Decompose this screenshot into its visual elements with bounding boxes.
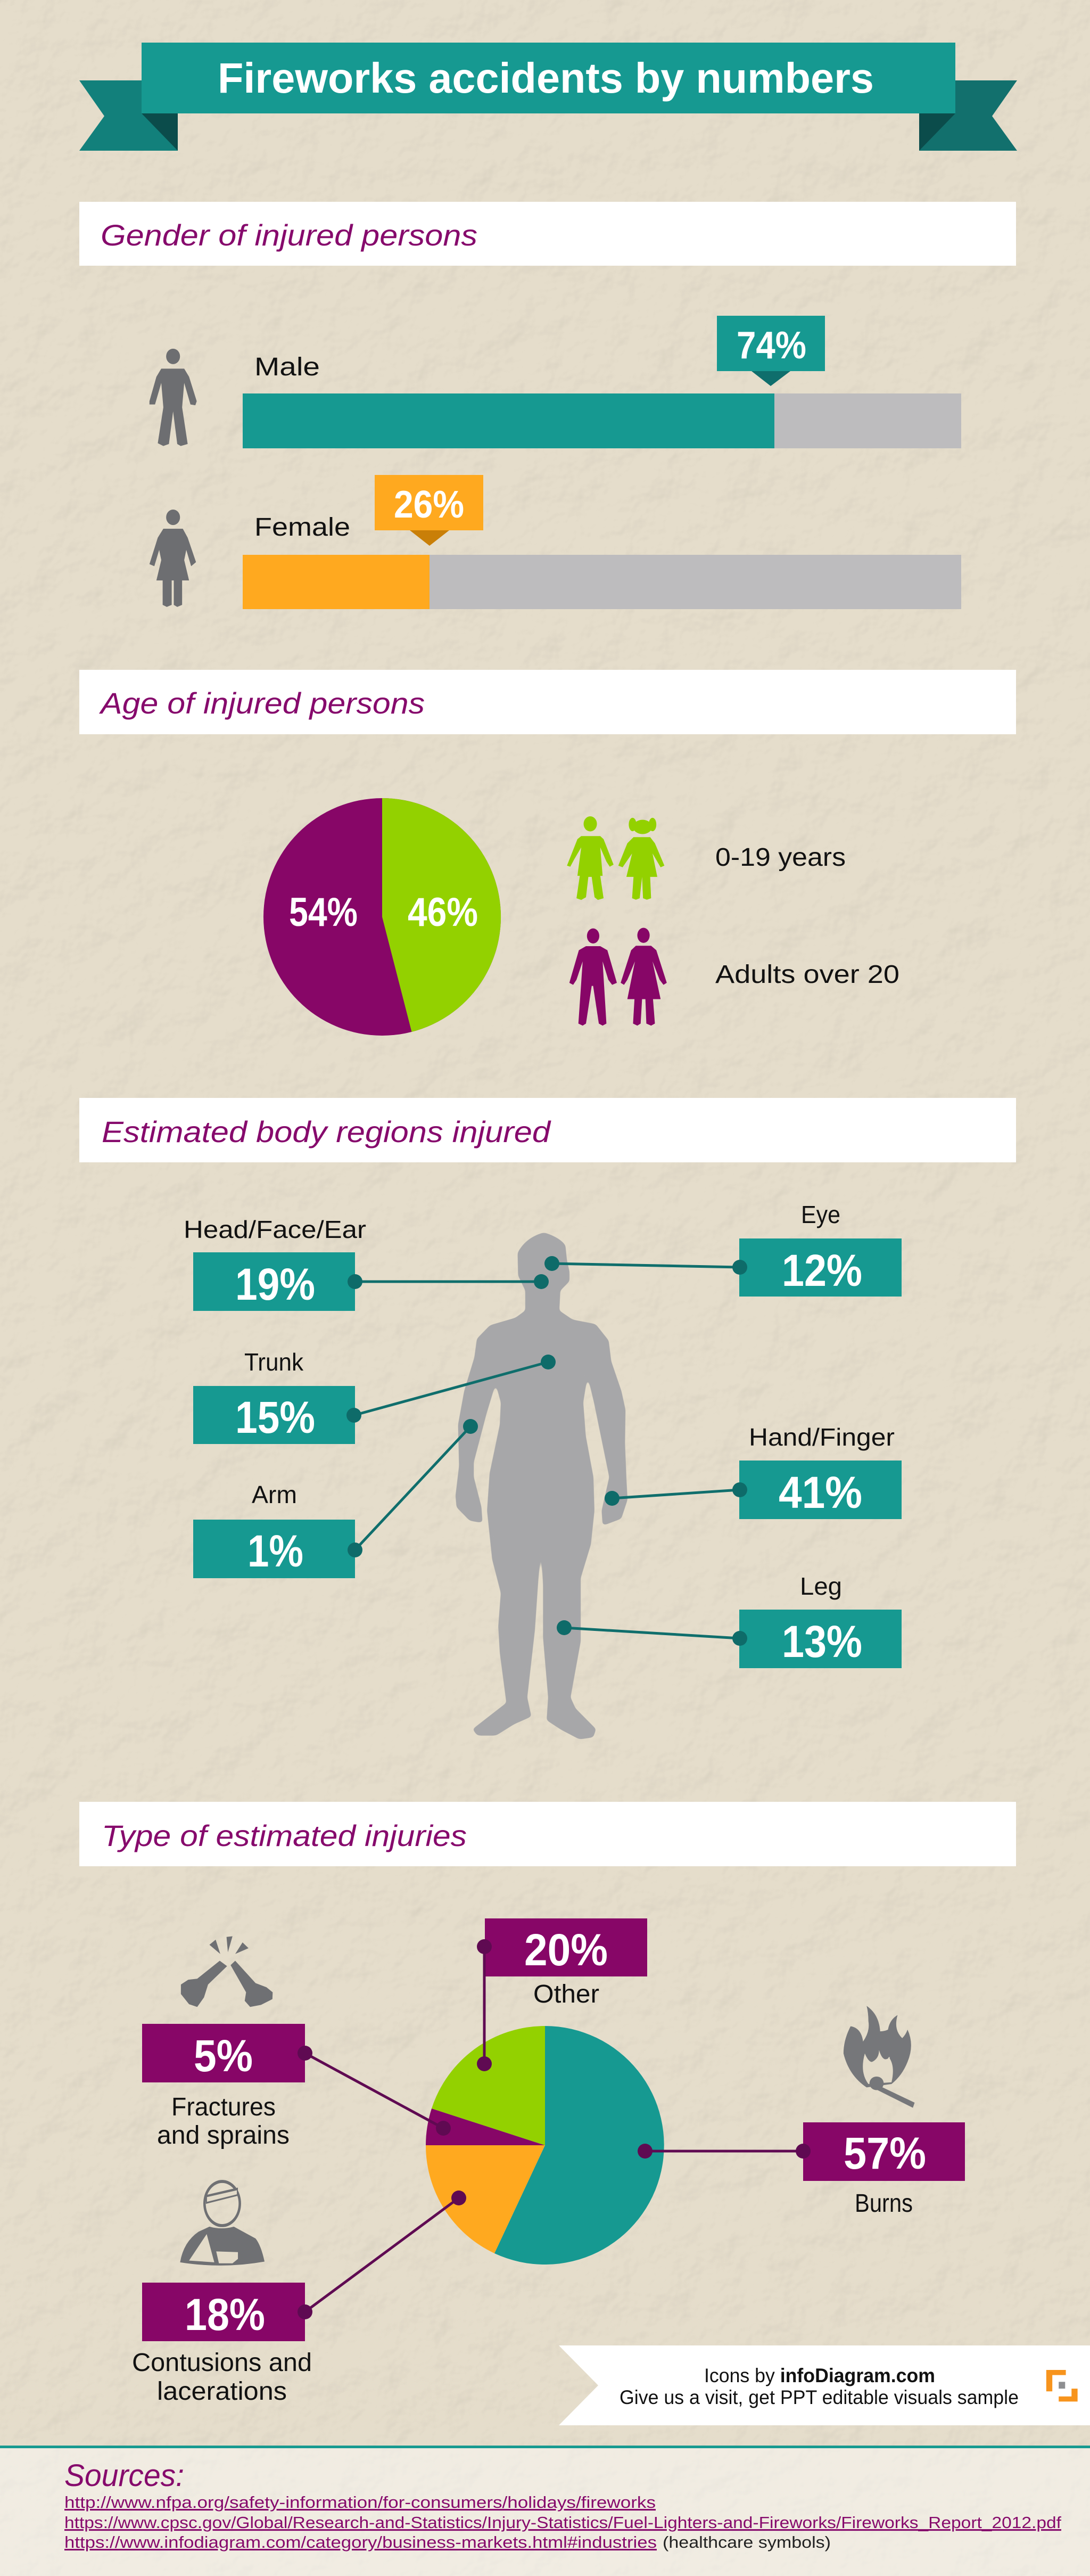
eye label: Eye [801,1201,840,1228]
label: other: Other [533,1980,599,2008]
heading bar: gender: Gender of injured persons [101,218,477,252]
callout: trunk 15%: 15% [235,1392,315,1442]
connector: contusions [298,2191,466,2319]
label: contusions and lacerations: Contusions and [132,2349,312,2377]
legend label: 0-19 years: 0-19 years [715,843,846,872]
callout: contusions 18%: 18% [185,2290,265,2340]
head/face/ear label: Head/Face/Ear [184,1216,366,1243]
icon: infoDiagram logo [1046,2370,1078,2401]
source link 2: https://www.cpsc.gov/Global/Research-and-Statistics/Injury-Statistics/Fuel-Lighters-and-Fireworks/Fireworks_Report_2012.pdf [64,2513,1061,2532]
male label: Male [254,353,320,381]
connector: leg [557,1620,747,1646]
callout: eye 12% [739,1238,902,1297]
title: Fireworks accidents by numbers [218,54,874,102]
female label: Female [254,513,350,542]
connector: head [348,1274,549,1289]
pie chart: injury types [426,2026,664,2265]
label: burns: Burns [855,2189,913,2218]
pie chart: age: 46% [408,890,478,935]
sources block [64,2458,1061,2552]
ribbon main band [142,43,955,113]
bar: female 26% [243,555,961,609]
heading bar: injury types [79,1802,1016,1866]
source link 3: https://www.infodiagram.com/category/business-markets.html#industries [64,2533,657,2552]
ribbon right tail [919,80,1017,151]
callout: other 20% [485,1918,647,1976]
callout: fractures 5% [142,2024,305,2082]
callout: trunk 15% [193,1386,355,1444]
heading bar: gender [79,202,1016,266]
callout: 74% [717,316,825,386]
callout: hand 41% [739,1461,902,1519]
legend label: adults over 20: Adults over 20 [715,961,899,989]
credit text: Give us a visit, get PPT editable visuals sample [620,2386,1019,2408]
arm label: Arm [252,1481,297,1508]
connector: other [477,1939,492,2071]
sources heading: Sources: [64,2458,184,2493]
connector: burns [638,2144,811,2159]
callout: head 19% [193,1252,355,1311]
icon: burning match [844,2006,915,2108]
callout: leg 13% [739,1610,902,1668]
label: contusions and lacerations: lacerations [157,2377,287,2406]
callout: arm 1% [193,1520,355,1578]
callout: contusions 18% [142,2283,305,2341]
bar: male 74% [243,393,961,448]
panel: gender of injured persons [79,202,1016,609]
pie chart: age [263,798,501,1036]
callout: fractures 5%: 5% [194,2031,253,2081]
label: fractures and sprains [157,2093,290,2150]
divider and sources background [0,2446,1090,2576]
connector: eye [544,1256,747,1275]
hand/finger label: Hand/Finger [749,1423,895,1451]
trunk label: Trunk [244,1348,304,1376]
heading bar: injury types: Type of estimated injuries [102,1819,467,1852]
title ribbon [79,43,1017,151]
callout: head 19%: 19% [235,1259,315,1309]
panel: age of injured persons [79,670,1016,1036]
icon: broken bone [181,1937,272,2007]
callout: arm 1%: 1% [247,1526,303,1576]
label: contusions and lacerations [132,2349,312,2406]
icon: man and woman [569,928,667,1026]
heading bar: body regions [79,1098,1016,1162]
leg label: Leg [800,1572,842,1600]
pie chart: age: 54% [289,890,358,935]
icon: male person [150,349,197,446]
heading bar: age: Age of injured persons [99,686,425,720]
icon: boy and girl [567,816,664,900]
panel: estimated body regions injured [79,1098,1016,1738]
callout: 74%: 74% [737,324,806,367]
connector: hand [605,1482,747,1506]
heading bar: age [79,670,1016,734]
credit text: Icons by infoDiagram.com [704,2365,935,2386]
icon: female person [150,510,196,607]
credit ribbon [559,2345,1090,2425]
body silhouette [457,1233,626,1738]
icon: bandaged person [180,2181,265,2266]
source note: (healthcare symbols) [663,2533,831,2552]
source link 1: http://www.nfpa.org/safety-information/for-consumers/holidays/fireworks [64,2493,656,2512]
callout: burns 57%: 57% [844,2128,926,2178]
callout: 26% [375,475,483,546]
callout: eye 12%: 12% [782,1245,862,1295]
panel: type of estimated injuries [79,1802,1016,2406]
ribbon left tail [79,80,178,151]
heading bar: body regions: Estimated body regions injured [102,1115,551,1148]
connector: arm [348,1419,478,1557]
callout: burns 57% [803,2122,965,2181]
callout: 26%: 26% [394,483,464,526]
callout: hand 41%: 41% [779,1467,862,1517]
callout: leg 13%: 13% [782,1617,862,1667]
connector: trunk [346,1355,556,1423]
connector: fractures [298,2046,451,2136]
label: fractures and sprains: Fractures [171,2093,276,2121]
label: fractures and sprains: and sprains [157,2121,290,2150]
callout: other 20%: 20% [524,1925,608,1975]
credit text [620,2365,1019,2408]
